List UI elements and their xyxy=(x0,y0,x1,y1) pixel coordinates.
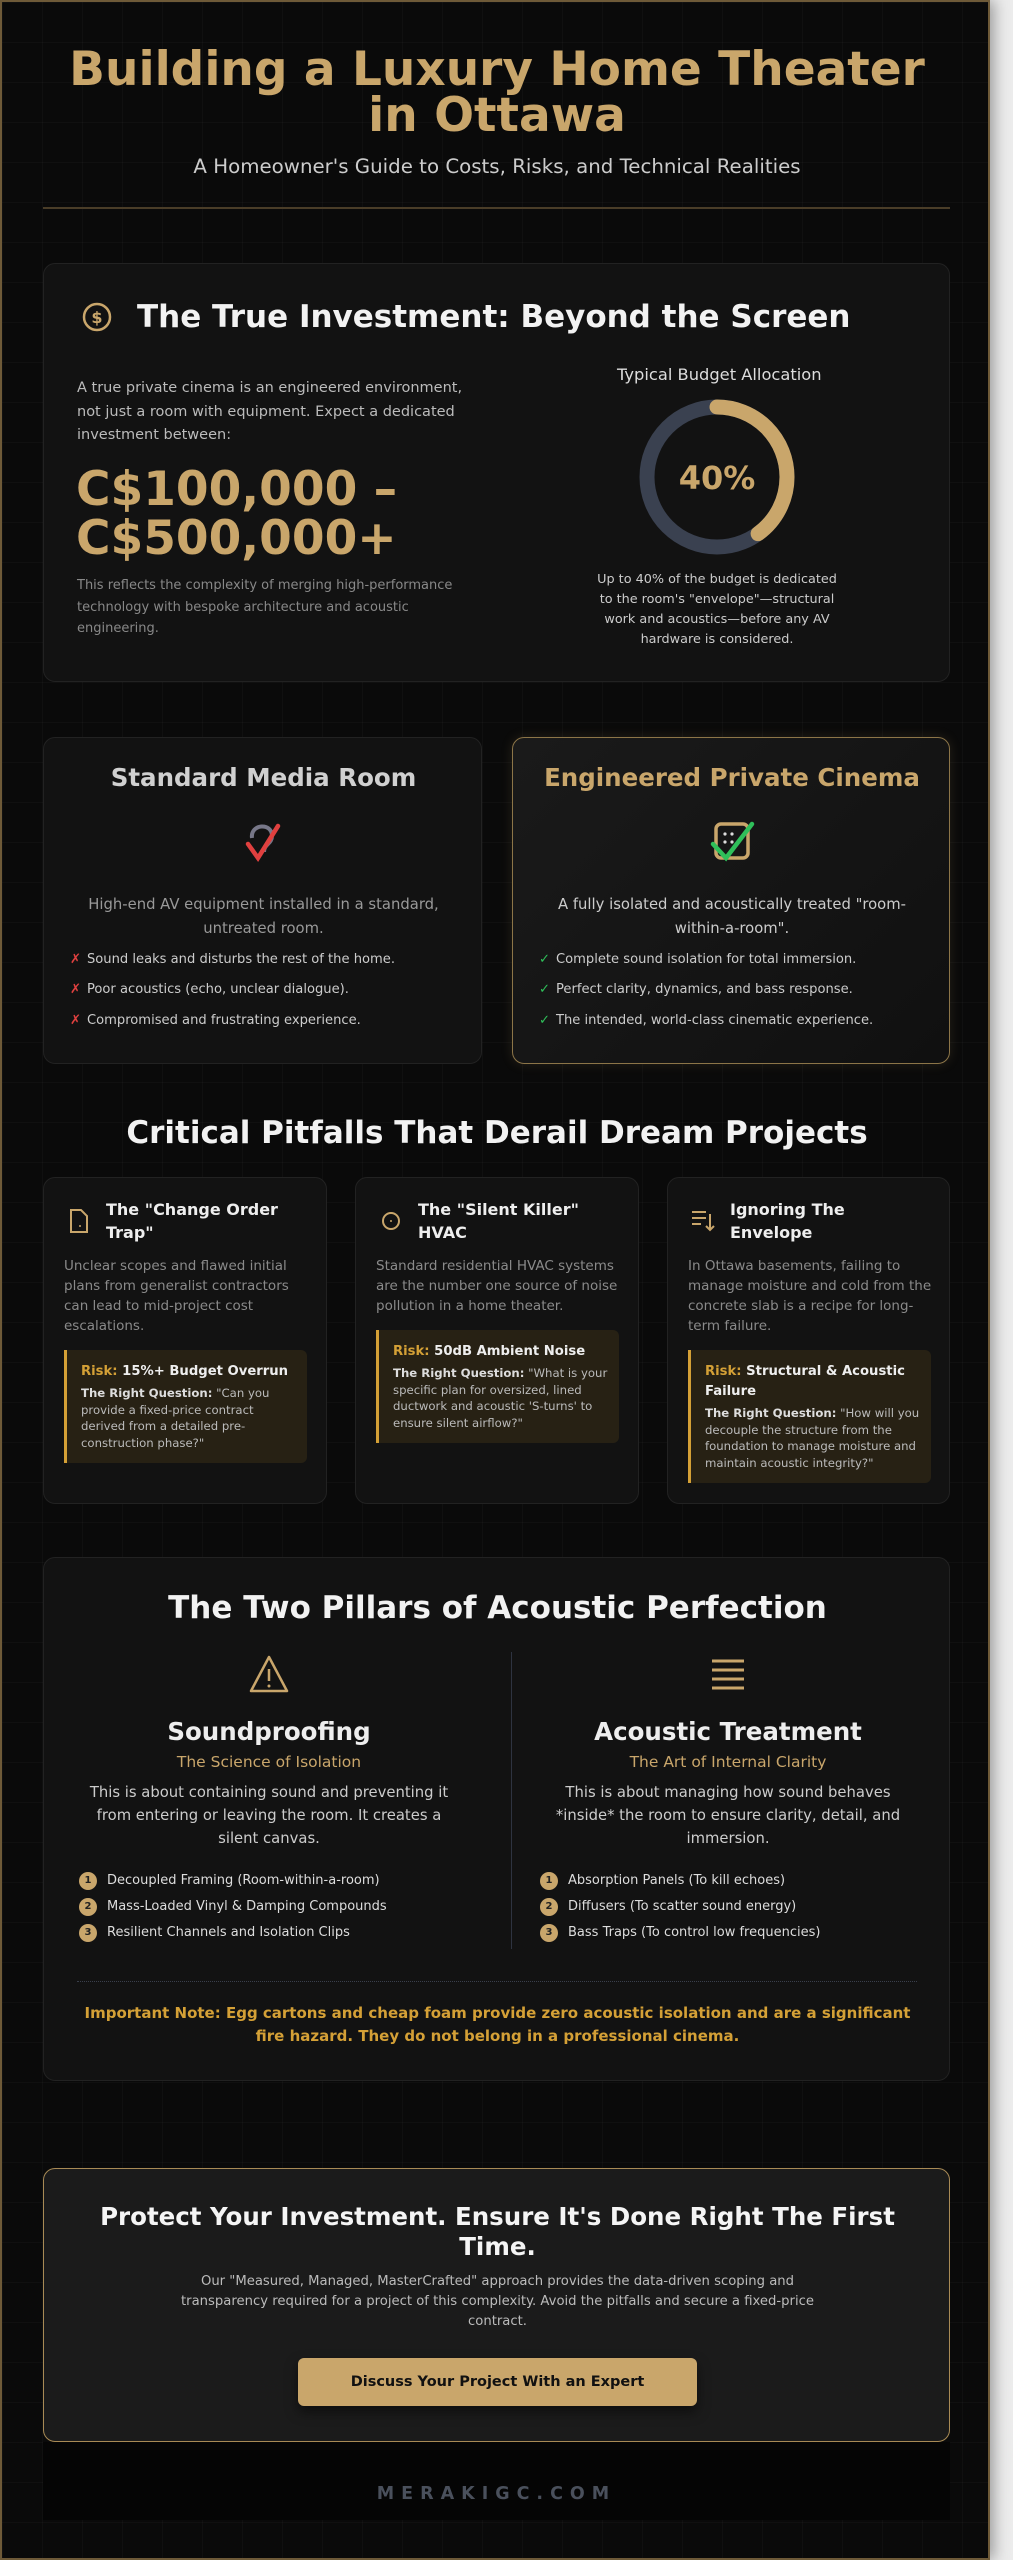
title: Envelope xyxy=(730,1223,812,1242)
panel: two pillars xyxy=(43,1557,950,2081)
column: soundproofing: from entering or leaving the room. It creates a xyxy=(97,1807,441,1824)
icon: money xyxy=(82,302,112,332)
risk box: decouple the structure from the xyxy=(705,1423,892,1437)
title xyxy=(730,1200,845,1242)
text: can lead to mid-project cost xyxy=(64,1298,253,1314)
text: concrete slab is a recipe for long- xyxy=(688,1298,913,1314)
small note: technology with bespoke architecture and acoustic xyxy=(77,600,409,614)
heading: Time. xyxy=(459,2232,536,2261)
risk box: The Right Question: "Can you xyxy=(81,1386,269,1400)
small note: engineering. xyxy=(77,621,159,636)
list: positives: ✓ Complete sound isolation for total immersion. xyxy=(539,952,856,967)
small note xyxy=(76,578,452,636)
column: soundproofing: silent canvas. xyxy=(218,1830,320,1847)
chart caption: hardware is considered. xyxy=(641,632,793,647)
risk box: specific plan for oversized, lined xyxy=(393,1383,582,1397)
list: treatment methods: Absorption Panels (To kill echoes) xyxy=(568,1873,785,1888)
column: soundproofing: Soundproofing xyxy=(167,1717,371,1746)
risk box: Risk: 15%+ Budget Overrun xyxy=(81,1364,288,1379)
icon: ear with red check xyxy=(246,824,280,862)
chart caption: Up to 40% of the budget is dedicated xyxy=(597,572,837,587)
list: treatment methods xyxy=(540,1872,820,1942)
icon: speaker with green check xyxy=(710,822,754,862)
description: untreated room. xyxy=(203,920,324,937)
icon: document xyxy=(70,1209,88,1233)
chart caption: work and acoustics—before any AV xyxy=(604,612,830,627)
risk box: provide a fixed-price contract xyxy=(81,1403,254,1417)
title xyxy=(69,42,925,143)
list: soundproofing methods: Resilient Channels and Isolation Clips xyxy=(107,1925,350,1940)
title: HVAC xyxy=(418,1223,467,1242)
list: soundproofing methods xyxy=(79,1872,387,1942)
text: term failure. xyxy=(688,1318,771,1334)
column: acoustic treatment: The Art of Internal Clarity xyxy=(630,1753,826,1771)
title: Ignoring The xyxy=(730,1200,845,1219)
panel: true investment xyxy=(43,263,950,682)
intro text: not just a room with equipment. Expect a dedicated xyxy=(77,404,455,420)
chart caption: to the room's "envelope"—structural xyxy=(600,592,834,607)
text: Standard residential HVAC systems xyxy=(376,1258,614,1274)
heading: Standard Media Room xyxy=(111,763,416,792)
risk box: Failure xyxy=(705,1384,756,1399)
intro text: investment between: xyxy=(77,427,231,443)
heading xyxy=(100,2202,895,2261)
text: pollution in a home theater. xyxy=(376,1298,563,1314)
risk box xyxy=(688,1350,931,1483)
list: positives: ✓ The intended, world-class cinematic experience. xyxy=(539,1013,873,1028)
list: negatives: ✗ Poor acoustics (echo, unclear dialogue). xyxy=(70,982,349,997)
list: treatment methods: 1 xyxy=(546,1874,552,1886)
list: treatment methods: 2 xyxy=(546,1900,552,1912)
icon: list arrow xyxy=(692,1211,715,1232)
title: Building a Luxury Home Theater xyxy=(69,42,925,97)
description: High-end AV equipment installed in a standard, xyxy=(88,896,439,913)
list: soundproofing methods: Decoupled Framing (Room-within-a-room) xyxy=(107,1873,380,1888)
title xyxy=(106,1200,278,1242)
column: acoustic treatment: Acoustic Treatment xyxy=(594,1717,862,1746)
list: soundproofing methods: Mass-Loaded Vinyl & Damping Compounds xyxy=(107,1899,387,1914)
column: soundproofing xyxy=(79,1656,448,1942)
risk box: Risk: 50dB Ambient Noise xyxy=(393,1344,585,1359)
icon: lines xyxy=(712,1660,744,1690)
chart caption xyxy=(597,572,837,647)
risk box: The Right Question: "How will you xyxy=(705,1406,919,1420)
list: soundproofing methods: 3 xyxy=(85,1926,91,1938)
list: positives: ✓ Perfect clarity, dynamics, and bass response. xyxy=(539,982,853,997)
intro text: A true private cinema is an engineered environment, xyxy=(77,380,462,396)
title: in Ottawa xyxy=(368,88,626,143)
risk box: maintain acoustic integrity?" xyxy=(705,1456,874,1470)
list: soundproofing methods: 1 xyxy=(85,1874,91,1886)
intro text xyxy=(77,380,462,443)
description xyxy=(558,896,906,937)
risk box: The Right Question: "What is your xyxy=(393,1366,607,1380)
risk box: Risk: Structural & Acoustic xyxy=(705,1364,905,1379)
column: acoustic treatment xyxy=(540,1660,900,1942)
heading: The True Investment: Beyond the Screen xyxy=(137,299,850,335)
column: acoustic treatment: *inside* the room to ensure clarity, detail, and xyxy=(556,1807,900,1824)
subtitle: A Homeowner's Guide to Costs, Risks, and Technical Realities xyxy=(193,155,801,178)
text: transparency required for a project of this complexity. Avoid the pitfalls and secure a fixed-price xyxy=(181,2294,814,2309)
icon: money: $ xyxy=(91,308,103,327)
column: acoustic treatment: immersion. xyxy=(686,1830,770,1847)
list: negatives xyxy=(70,952,395,1028)
risk box: ductwork and acoustic 'S-turns' to xyxy=(393,1399,592,1413)
text: plans from generalist contractors xyxy=(64,1278,289,1294)
button xyxy=(298,2358,697,2406)
text: contract. xyxy=(468,2314,527,2329)
risk box xyxy=(376,1330,619,1443)
description xyxy=(88,896,439,937)
description: within-a-room". xyxy=(675,920,789,937)
heading: Protect Your Investment. Ensure It's Done Right The First xyxy=(100,2202,895,2231)
risk box: foundation to manage moisture and xyxy=(705,1439,916,1453)
text: manage moisture and cold from the xyxy=(688,1278,931,1294)
heading: The Two Pillars of Acoustic Perfection xyxy=(168,1590,827,1626)
important note: fire hazard. They do not belong in a professional cinema. xyxy=(256,2027,739,2045)
risk box: construction phase?" xyxy=(81,1436,204,1450)
donut chart xyxy=(640,400,794,554)
chart label: Typical Budget Allocation xyxy=(617,365,822,384)
text xyxy=(376,1258,617,1314)
card: change order trap xyxy=(43,1177,327,1504)
column: acoustic treatment: This is about managing how sound behaves xyxy=(565,1784,891,1801)
small note: This reflects the complexity of merging high-performance xyxy=(77,578,452,593)
title: The "Silent Killer" xyxy=(418,1200,579,1219)
footer: MERAKIGC.COM xyxy=(377,2484,616,2504)
column: soundproofing: This is about containing sound and preventing it xyxy=(90,1784,448,1801)
title: Trap" xyxy=(106,1223,154,1242)
text: are the number one source of noise xyxy=(376,1278,617,1294)
footer xyxy=(43,2442,950,2520)
text xyxy=(688,1258,931,1334)
list: negatives: ✗ Compromised and frustrating experience. xyxy=(70,1013,361,1028)
donut chart: 40% xyxy=(679,459,755,497)
text: Unclear scopes and flawed initial xyxy=(64,1258,287,1274)
risk box xyxy=(64,1350,307,1463)
description: A fully isolated and acoustically treated "room- xyxy=(558,896,906,913)
risk box: ensure silent airflow?" xyxy=(393,1416,523,1430)
price range xyxy=(76,462,397,566)
button: Discuss Your Project With an Expert xyxy=(351,2374,644,2390)
list: soundproofing methods: 2 xyxy=(85,1900,91,1912)
panel: engineered private cinema xyxy=(512,737,950,1064)
icon: circle xyxy=(382,1212,400,1230)
title: The "Change Order xyxy=(106,1200,278,1219)
list: treatment methods: 3 xyxy=(546,1926,552,1938)
heading: Engineered Private Cinema xyxy=(544,763,920,792)
risk box: derived from a detailed pre- xyxy=(81,1419,245,1433)
text xyxy=(181,2274,814,2329)
panel: call to action xyxy=(43,2168,950,2442)
panel: standard media room xyxy=(43,737,482,1064)
text: In Ottawa basements, failing to xyxy=(688,1258,900,1274)
divider xyxy=(511,1652,512,1949)
card: ignoring the envelope xyxy=(667,1177,950,1504)
price range: C$500,000+ xyxy=(76,511,397,566)
title xyxy=(418,1200,579,1242)
list: treatment methods: Bass Traps (To control low frequencies) xyxy=(568,1925,820,1940)
card: silent killer hvac xyxy=(355,1177,639,1504)
important note xyxy=(85,2004,910,2045)
text xyxy=(64,1258,289,1334)
heading: pitfalls: Critical Pitfalls That Derail Dream Projects xyxy=(126,1115,868,1151)
icon: warning xyxy=(250,1656,288,1692)
list: treatment methods: Diffusers (To scatter sound energy) xyxy=(568,1899,796,1914)
text: Our "Measured, Managed, MasterCrafted" approach provides the data-driven scoping and xyxy=(201,2274,794,2289)
text: escalations. xyxy=(64,1318,144,1334)
important note: Important Note: Egg cartons and cheap foam provide zero acoustic isolation and are a significant xyxy=(85,2004,910,2022)
list: negatives: ✗ Sound leaks and disturbs the rest of the home. xyxy=(70,952,395,967)
price range: C$100,000 – xyxy=(76,462,397,517)
column: soundproofing: The Science of Isolation xyxy=(177,1753,361,1771)
list: positives xyxy=(539,952,873,1028)
